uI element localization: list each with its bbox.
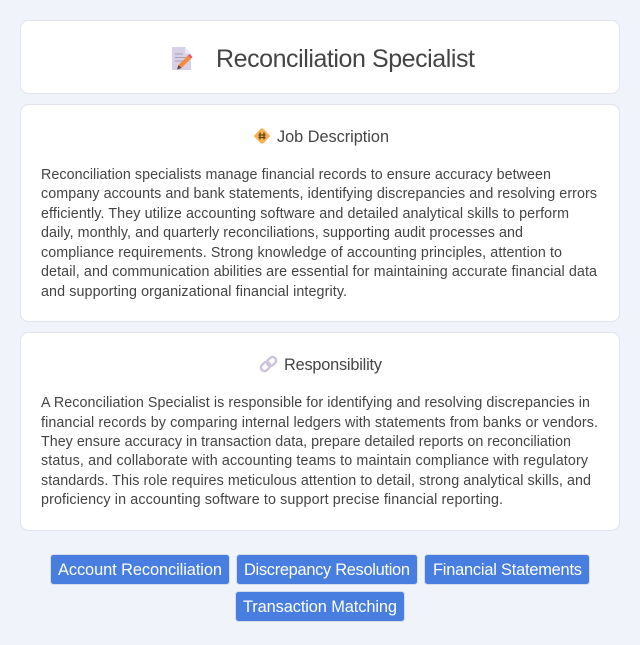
text block: job description: detail, and communication abilities are essential for maintaining accurate financial data — [41, 264, 597, 280]
text block: job description: Reconciliation specialists manage financial records to ensure accuracy between — [41, 167, 551, 183]
tag: discrepancy resolution — [236, 554, 418, 584]
text block: job description: company accounts and bank statements, identifying discrepancies and resolving errors — [41, 186, 597, 202]
heading: job description: Job Description — [277, 128, 389, 146]
text block: responsibility: status, and collaborate with accounting teams to maintain compliance with regulatory — [41, 453, 589, 469]
tag: account reconciliation: Account Reconciliation — [58, 561, 222, 579]
text block: responsibility: standards. This role requires meticulous attention to detail, strong analytical skills, and — [41, 473, 591, 489]
tag: financial statements: Financial Statements — [433, 561, 582, 579]
text block: responsibility: financial records by comparing internal ledgers with statements from banks or vendors. — [41, 415, 598, 431]
tag: financial statements — [424, 554, 590, 584]
text block: responsibility — [41, 395, 598, 508]
panel: responsibility — [20, 332, 620, 530]
tag: transaction matching: Transaction Matching — [243, 598, 397, 616]
text block: job description — [41, 167, 597, 300]
text block: responsibility: They ensure accuracy in transaction data, prepare detailed reports on reconciliation — [41, 434, 571, 450]
icon: document with pencil — [172, 47, 192, 70]
tag: transaction matching — [236, 592, 404, 622]
icon: diamond sign — [254, 128, 270, 144]
text block: job description: and supporting organizational financial integrity. — [41, 284, 347, 300]
text block: job description: daily, monthly, and quarterly reconciliations, supporting audit processes and — [41, 225, 523, 241]
tag: account reconciliation — [50, 554, 230, 584]
text block: responsibility: proficiency in accounting software to support precise financial reporting. — [41, 492, 503, 508]
text block: job description: compliance requirements. Strong knowledge of accounting principles, attention to — [41, 245, 562, 261]
icon: chain link — [259, 355, 278, 373]
tag: discrepancy resolution: Discrepancy Resolution — [244, 561, 410, 579]
text block: job description: efficiently. They utilize accounting software and detailed analytical skills to perform — [41, 206, 569, 222]
title: Reconciliation Specialist — [216, 45, 475, 73]
panel: title card — [20, 20, 620, 94]
panel: job description — [20, 104, 620, 322]
text block: responsibility: A Reconciliation Specialist is responsible for identifying and resolving discrepancies in — [41, 395, 590, 411]
tags — [50, 554, 590, 622]
heading: responsibility: Responsibility — [284, 356, 383, 374]
